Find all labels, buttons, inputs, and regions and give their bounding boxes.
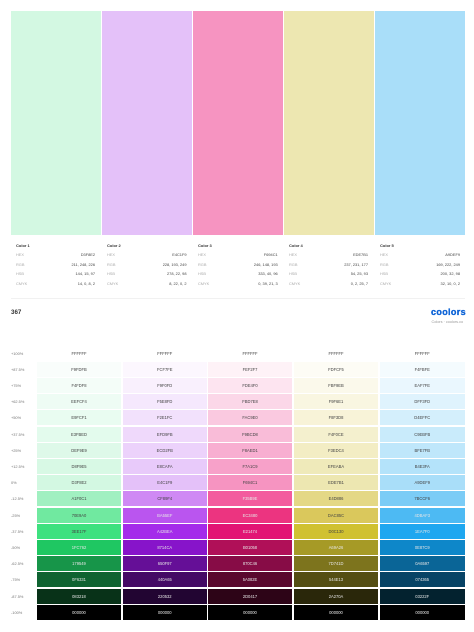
row 0%: E4C1F9 (157, 480, 172, 485)
row +25% (11, 443, 465, 458)
row +100% (11, 351, 430, 356)
text block: color 1 details: D3F8E2 (81, 252, 95, 257)
text block: color 5 details: RGB (380, 262, 388, 267)
row -50%: 1FC762 (72, 545, 86, 550)
row +12.5% (11, 459, 465, 474)
row -25%: 4DBAF3 (414, 513, 430, 518)
row +62.5%: DFF3FD (414, 399, 430, 404)
row +50%: E9FCF1 (71, 415, 87, 420)
row -75% (11, 572, 465, 587)
row +62.5%: F9F6E1 (329, 399, 343, 404)
row +12.5%: B4E3FA (415, 464, 430, 469)
row +62.5%: FBD7E8 (242, 399, 258, 404)
text block: color 5 details (380, 242, 460, 286)
row -62.5%: 0A6597 (415, 561, 429, 566)
row +50%: FAC9E0 (242, 415, 258, 420)
row -50%: 0E87C9 (415, 545, 430, 550)
row +87.5% (11, 362, 465, 377)
row -12.5%: CF89F4 (157, 496, 172, 501)
row -100%: 000000 (72, 610, 86, 615)
swatch: color 1 (11, 11, 100, 235)
text block: color 2 details: E4C1F9 (172, 252, 186, 257)
row -75%: 0F6331 (72, 577, 86, 582)
row -75%: 544E13 (329, 577, 343, 582)
row -37.5%: E21474 (243, 529, 257, 534)
row +87.5%: FDFCF5 (328, 367, 344, 372)
text block: color 4 details: HEX (289, 252, 297, 257)
row +12.5%: D8F9E5 (71, 464, 87, 469)
text block: color 2 details: 228, 193, 249 (163, 262, 186, 267)
row +25%: ECD2FB (157, 448, 173, 453)
row -37.5%: D0C130 (328, 529, 344, 534)
row -37.5% (11, 524, 465, 539)
row -75%: 5A082E (243, 577, 257, 582)
swatch: color 5 (375, 11, 465, 235)
row -12.5% (11, 491, 465, 506)
text block: color 2 details (107, 242, 186, 286)
row 0%: 0% (11, 480, 17, 485)
row +62.5% (11, 394, 465, 409)
row 0%: D3F8E2 (71, 480, 87, 485)
row +100%: FFFFFF (71, 351, 86, 356)
row +50%: D4EFFC (414, 415, 430, 420)
text block: color 2 details: HEX (107, 252, 115, 257)
row +25%: F3EDC4 (328, 448, 344, 453)
text block: color 3 details: RGB (198, 262, 206, 267)
row +75%: FDE4F0 (242, 383, 258, 388)
text block: color 5 details: A9DEF9 (445, 252, 460, 257)
row +75%: FBF9EB (328, 383, 344, 388)
row +62.5%: +62.5% (11, 399, 24, 404)
row -62.5%: -62.5% (11, 561, 23, 566)
row +75%: EAF7FE (414, 383, 430, 388)
text block: color 3 details: 0, 39, 21, 3 (258, 280, 278, 286)
row +50%: +50% (11, 415, 21, 420)
row +75%: +75% (11, 383, 21, 388)
row +100%: FFFFFF (328, 351, 344, 356)
text block: color 1 details: 144, 15, 97 (76, 271, 95, 276)
row +87.5%: FCF7FE (157, 367, 172, 372)
row +75% (11, 378, 465, 393)
row +100%: +100% (11, 351, 23, 356)
row -87.5%: 2A270A (329, 594, 343, 599)
row -62.5%: 650F97 (158, 561, 172, 566)
row +50%: F8F3D8 (329, 415, 343, 420)
row -12.5%: 7BCCF6 (414, 496, 430, 501)
row 0% (11, 475, 465, 490)
row +37.5%: EFD9FB (157, 432, 173, 437)
row 0%: F694C1 (243, 480, 257, 485)
text block: color 1 details: 14, 0, 8, 2 (78, 280, 95, 286)
text block: color 3 details: Color 3 (198, 242, 212, 248)
row +100%: FFFFFF (415, 351, 430, 356)
text block: color 1 details: 211, 248, 226 (71, 262, 95, 267)
row -75%: 440A65 (158, 577, 172, 582)
row -25%: EC3480 (243, 513, 257, 518)
text block: color 3 details: HEX (198, 252, 206, 257)
text block: color 1 details: RGB (16, 262, 24, 267)
row +37.5%: F9BCD8 (242, 432, 258, 437)
row -12.5%: -12.5% (11, 496, 23, 501)
row -37.5%: 3EE17F (72, 529, 86, 534)
swatch: color 3 (193, 11, 282, 235)
panel: shades table (11, 351, 465, 620)
row +37.5%: +37.5% (11, 432, 24, 437)
row -25%: -25% (11, 513, 20, 518)
row +87.5%: F9FDFB (71, 367, 87, 372)
text block: color 1 details: CMYK (16, 280, 27, 286)
row +50%: F2E1FC (157, 415, 172, 420)
row -25%: BA55EF (157, 513, 172, 518)
row -100% (11, 605, 465, 620)
text block: color 2 details: CMYK (107, 280, 118, 286)
row +37.5%: F4F0CE (328, 432, 344, 437)
row -100%: 000000 (329, 610, 343, 615)
text block: color 4 details: 0, 2, 25, 7 (351, 280, 368, 286)
row +62.5%: F5E8FD (157, 399, 172, 404)
row -50%: B01058 (243, 545, 257, 550)
row -87.5%: 083218 (72, 594, 86, 599)
text block: color 1 details: HEX (16, 252, 24, 257)
row -50%: 8714CA (157, 545, 172, 550)
row -87.5%: -87.5% (11, 594, 23, 599)
row +37.5%: E3FBED (71, 432, 87, 437)
row -62.5% (11, 556, 465, 571)
row -100%: 000000 (415, 610, 429, 615)
text block: color 4 details: 54, 25, 93 (351, 271, 368, 276)
row -50%: -50% (11, 545, 20, 550)
text block: color 1 details (16, 242, 95, 286)
row -12.5%: A1F0C1 (71, 496, 87, 501)
row -100%: -100% (11, 610, 22, 615)
row +50% (11, 410, 465, 425)
row +100%: FFFFFF (157, 351, 172, 356)
row -62.5%: 179549 (72, 561, 86, 566)
row -25%: 70E9A0 (72, 513, 86, 518)
text block: color 2 details: 8, 22, 0, 2 (169, 280, 186, 286)
text block: color 3 details: F694C1 (264, 252, 278, 257)
row +12.5%: EFEABA (328, 464, 344, 469)
row +25%: DEF9E9 (71, 448, 87, 453)
row -75%: -75% (11, 577, 20, 582)
row +12.5%: +12.5% (11, 464, 24, 469)
row -37.5%: 1EA7F0 (415, 529, 430, 534)
text block: color 4 details: HSB (289, 271, 297, 276)
text block: color 1 details: HSB (16, 271, 24, 276)
heading: palette number: 367 (11, 309, 21, 316)
text block: color 5 details: CMYK (380, 280, 391, 286)
row +12.5%: F7A1C9 (242, 464, 258, 469)
row -87.5%: 2D0417 (243, 594, 257, 599)
text block: color 3 details: 246, 148, 193 (254, 262, 278, 267)
text block: color 5 details: 169, 222, 249 (436, 262, 460, 267)
row 0%: A9DEF9 (414, 480, 430, 485)
row -62.5%: 7D741D (328, 561, 344, 566)
text block: color 2 details: 278, 22, 98 (167, 271, 186, 276)
row 0%: EDE7B1 (328, 480, 344, 485)
row -37.5%: -37.5% (11, 529, 23, 534)
row -87.5% (11, 589, 465, 604)
swatch: color 4 (284, 11, 374, 235)
row +25%: BFE7FB (414, 448, 430, 453)
row +25%: +25% (11, 448, 21, 453)
text block: color 3 details: HSB (198, 271, 206, 276)
swatch: color 2 (102, 11, 192, 235)
row -25%: DAC85C (328, 513, 344, 518)
row +100%: FFFFFF (242, 351, 258, 356)
row -50%: A69A26 (329, 545, 343, 550)
row +87.5%: F4FBFE (415, 367, 430, 372)
text block: color 5 details: HSB (380, 271, 388, 276)
row +75%: F4FDF8 (71, 383, 86, 388)
row +75%: F9F0FD (157, 383, 172, 388)
row +37.5% (11, 427, 465, 442)
row -87.5%: 220532 (158, 594, 172, 599)
row -12.5%: E4D886 (329, 496, 343, 501)
text block: color 5 details: Color 5 (380, 242, 394, 248)
logo: coolors: coolors (431, 307, 466, 317)
row -87.5%: 03222F (415, 594, 429, 599)
row +87.5%: FEF2F7 (243, 367, 257, 372)
text block: color 4 details: CMYK (289, 280, 300, 286)
text block: color 2 details: RGB (107, 262, 115, 267)
text block: color 5 details: 32, 10, 0, 2 (441, 280, 460, 286)
text block: color 2 details: HSB (107, 271, 115, 276)
text block: color 5 details: 200, 32, 98 (441, 271, 460, 276)
row +87.5%: +87.5% (11, 367, 24, 372)
row -50% (11, 540, 465, 555)
text block: color 4 details: Color 4 (289, 242, 303, 248)
row -100%: 000000 (158, 610, 172, 615)
text block: color 5 details: HEX (380, 252, 388, 257)
row +25%: F8AED1 (242, 448, 258, 453)
panel: color swatches (11, 11, 465, 235)
text block: color 2 details: Color 2 (107, 242, 121, 248)
row +12.5%: E8CAFA (157, 464, 173, 469)
text block: color 3 details (198, 242, 278, 286)
row -12.5%: F35B9E (243, 496, 257, 501)
text block: color 4 details: 237, 231, 177 (344, 262, 368, 267)
row +37.5%: C9EBFB (414, 432, 430, 437)
row -25% (11, 508, 465, 523)
text block: color 3 details: CMYK (198, 280, 209, 286)
row -75%: 074365 (415, 577, 429, 582)
row -37.5%: A42BEA (157, 529, 172, 534)
text block: color 4 details: EDE7B1 (353, 252, 368, 257)
text block: color 4 details (289, 242, 368, 286)
row -100%: 000000 (243, 610, 257, 615)
text block: color 4 details: RGB (289, 262, 297, 267)
text block: color 1 details: Color 1 (16, 242, 30, 248)
text: logo caption: Colors · coolors.co (432, 320, 463, 324)
row -62.5%: 870C46 (243, 561, 257, 566)
text block: color 3 details: 333, 40, 96 (258, 271, 278, 276)
row +62.5%: EEFCF4 (71, 399, 87, 404)
